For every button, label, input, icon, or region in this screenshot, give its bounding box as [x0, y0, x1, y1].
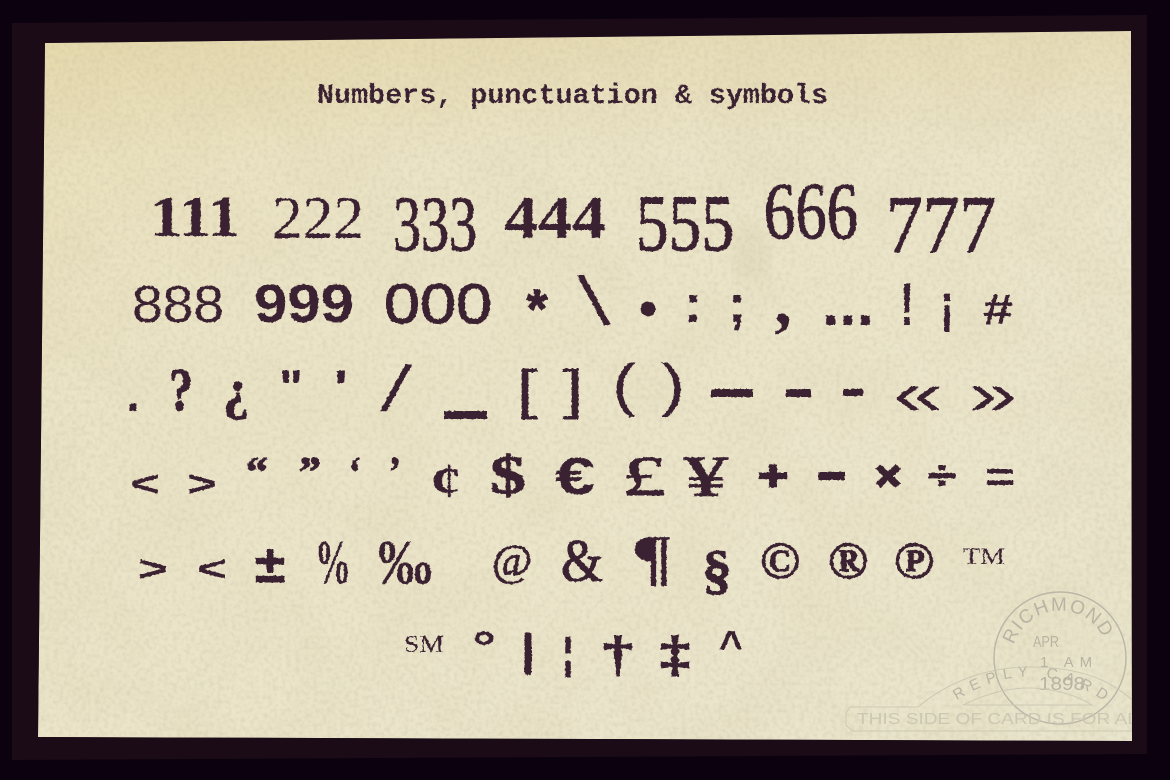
- plus: +: [758, 452, 788, 499]
- registered: ®: [828, 533, 868, 590]
- postmark stamp: REPLY CARD: [952, 666, 1108, 700]
- row 2: digits 8 to 0 and punctuation: [132, 263, 1013, 344]
- section: §: [702, 540, 732, 600]
- copyright: ©: [760, 533, 800, 590]
- postmark stamp: THIS SIDE OF CARD IS FOR AD: [857, 711, 1141, 728]
- left guillemet: «: [893, 360, 943, 427]
- postmark stamp: 1 AM: [1040, 654, 1098, 671]
- fours: 444: [504, 185, 606, 251]
- question mark: ?: [169, 357, 193, 423]
- row 6: remaining symbols: [404, 622, 743, 681]
- minus: [818, 472, 845, 480]
- dollar: $: [490, 445, 526, 505]
- postmark stamp: 1898: [1039, 674, 1085, 694]
- plus minus: ±: [255, 536, 285, 594]
- greater than: >: [138, 548, 168, 589]
- straight single quote: ': [334, 360, 348, 416]
- per mille: ‰: [378, 529, 432, 597]
- em dash: [711, 389, 753, 397]
- eights: 888: [132, 276, 224, 334]
- semicolon: ;: [728, 274, 746, 334]
- hyphen: [843, 389, 863, 396]
- double dagger: ‡: [660, 625, 690, 681]
- straight double quote: ": [279, 360, 303, 416]
- service mark: SM: [404, 632, 444, 658]
- ellipsis: ...: [822, 267, 874, 339]
- postmark stamp: [846, 591, 1132, 732]
- title: Numbers, punctuation & symbols: [317, 81, 828, 112]
- postmark stamp: APR: [1033, 634, 1059, 651]
- right double quote: ”: [299, 450, 321, 496]
- period: .: [126, 366, 140, 422]
- postmark stamp: RICHMOND: [1002, 598, 1112, 644]
- exclamation: !: [900, 271, 914, 338]
- less than: <: [197, 548, 227, 589]
- dagger: †: [603, 625, 633, 681]
- row 3: punctuation and brackets: [126, 353, 1017, 429]
- euro: €: [555, 448, 595, 506]
- en dash: [786, 389, 811, 397]
- broken bar: ¦: [562, 629, 574, 678]
- left single quote: ‘: [349, 450, 361, 496]
- times: ×: [875, 452, 901, 499]
- threes: 333: [393, 180, 477, 267]
- row 1: digits 1 to 7: [150, 168, 996, 270]
- left bracket: [: [516, 358, 538, 420]
- caret: ^: [719, 622, 743, 669]
- printed ink: [126, 81, 1017, 681]
- comma: ,: [774, 263, 792, 340]
- cent: ¢: [431, 452, 461, 508]
- twos: 222: [272, 185, 364, 251]
- zeros: 000: [384, 272, 492, 335]
- at sign: @: [492, 536, 532, 585]
- divide: ÷: [928, 454, 956, 498]
- sound recording mark: ℗: [894, 533, 934, 590]
- row 4: quotes, currency and math: [130, 444, 1015, 509]
- trademark: TM: [963, 544, 1005, 569]
- sevens: 777: [886, 179, 996, 270]
- bullet: [640, 302, 656, 316]
- inverted question mark: ¿: [223, 359, 249, 421]
- yen: ¥: [684, 444, 728, 509]
- underscore: [444, 411, 487, 419]
- nines: 999: [254, 274, 354, 334]
- less than: <: [130, 463, 160, 504]
- slash: /: [377, 358, 415, 429]
- colon: :: [684, 274, 702, 334]
- sixes: 666: [764, 168, 858, 256]
- backslash: \: [574, 269, 614, 344]
- vertical bar: [524, 632, 532, 675]
- row 5: comparison, percent and marks: [138, 524, 1005, 600]
- pilcrow: ¶: [631, 524, 673, 592]
- left double quote: “: [246, 450, 268, 496]
- ones: 111: [150, 184, 240, 249]
- right bracket: ]: [562, 358, 584, 420]
- equals: =: [985, 453, 1015, 500]
- fives: 555: [636, 180, 734, 268]
- right single quote: ’: [389, 450, 401, 496]
- left paren: (: [612, 353, 636, 418]
- right paren: ): [661, 353, 685, 418]
- greater than: >: [187, 463, 217, 504]
- hash: #: [983, 285, 1013, 334]
- pound: £: [622, 446, 666, 508]
- degree: °: [472, 623, 496, 672]
- right guillemet: »: [969, 360, 1017, 427]
- asterisk: *: [526, 279, 548, 339]
- percent: %: [315, 529, 351, 597]
- ampersand: &: [561, 528, 603, 594]
- inverted exclamation: ¡: [940, 272, 954, 335]
